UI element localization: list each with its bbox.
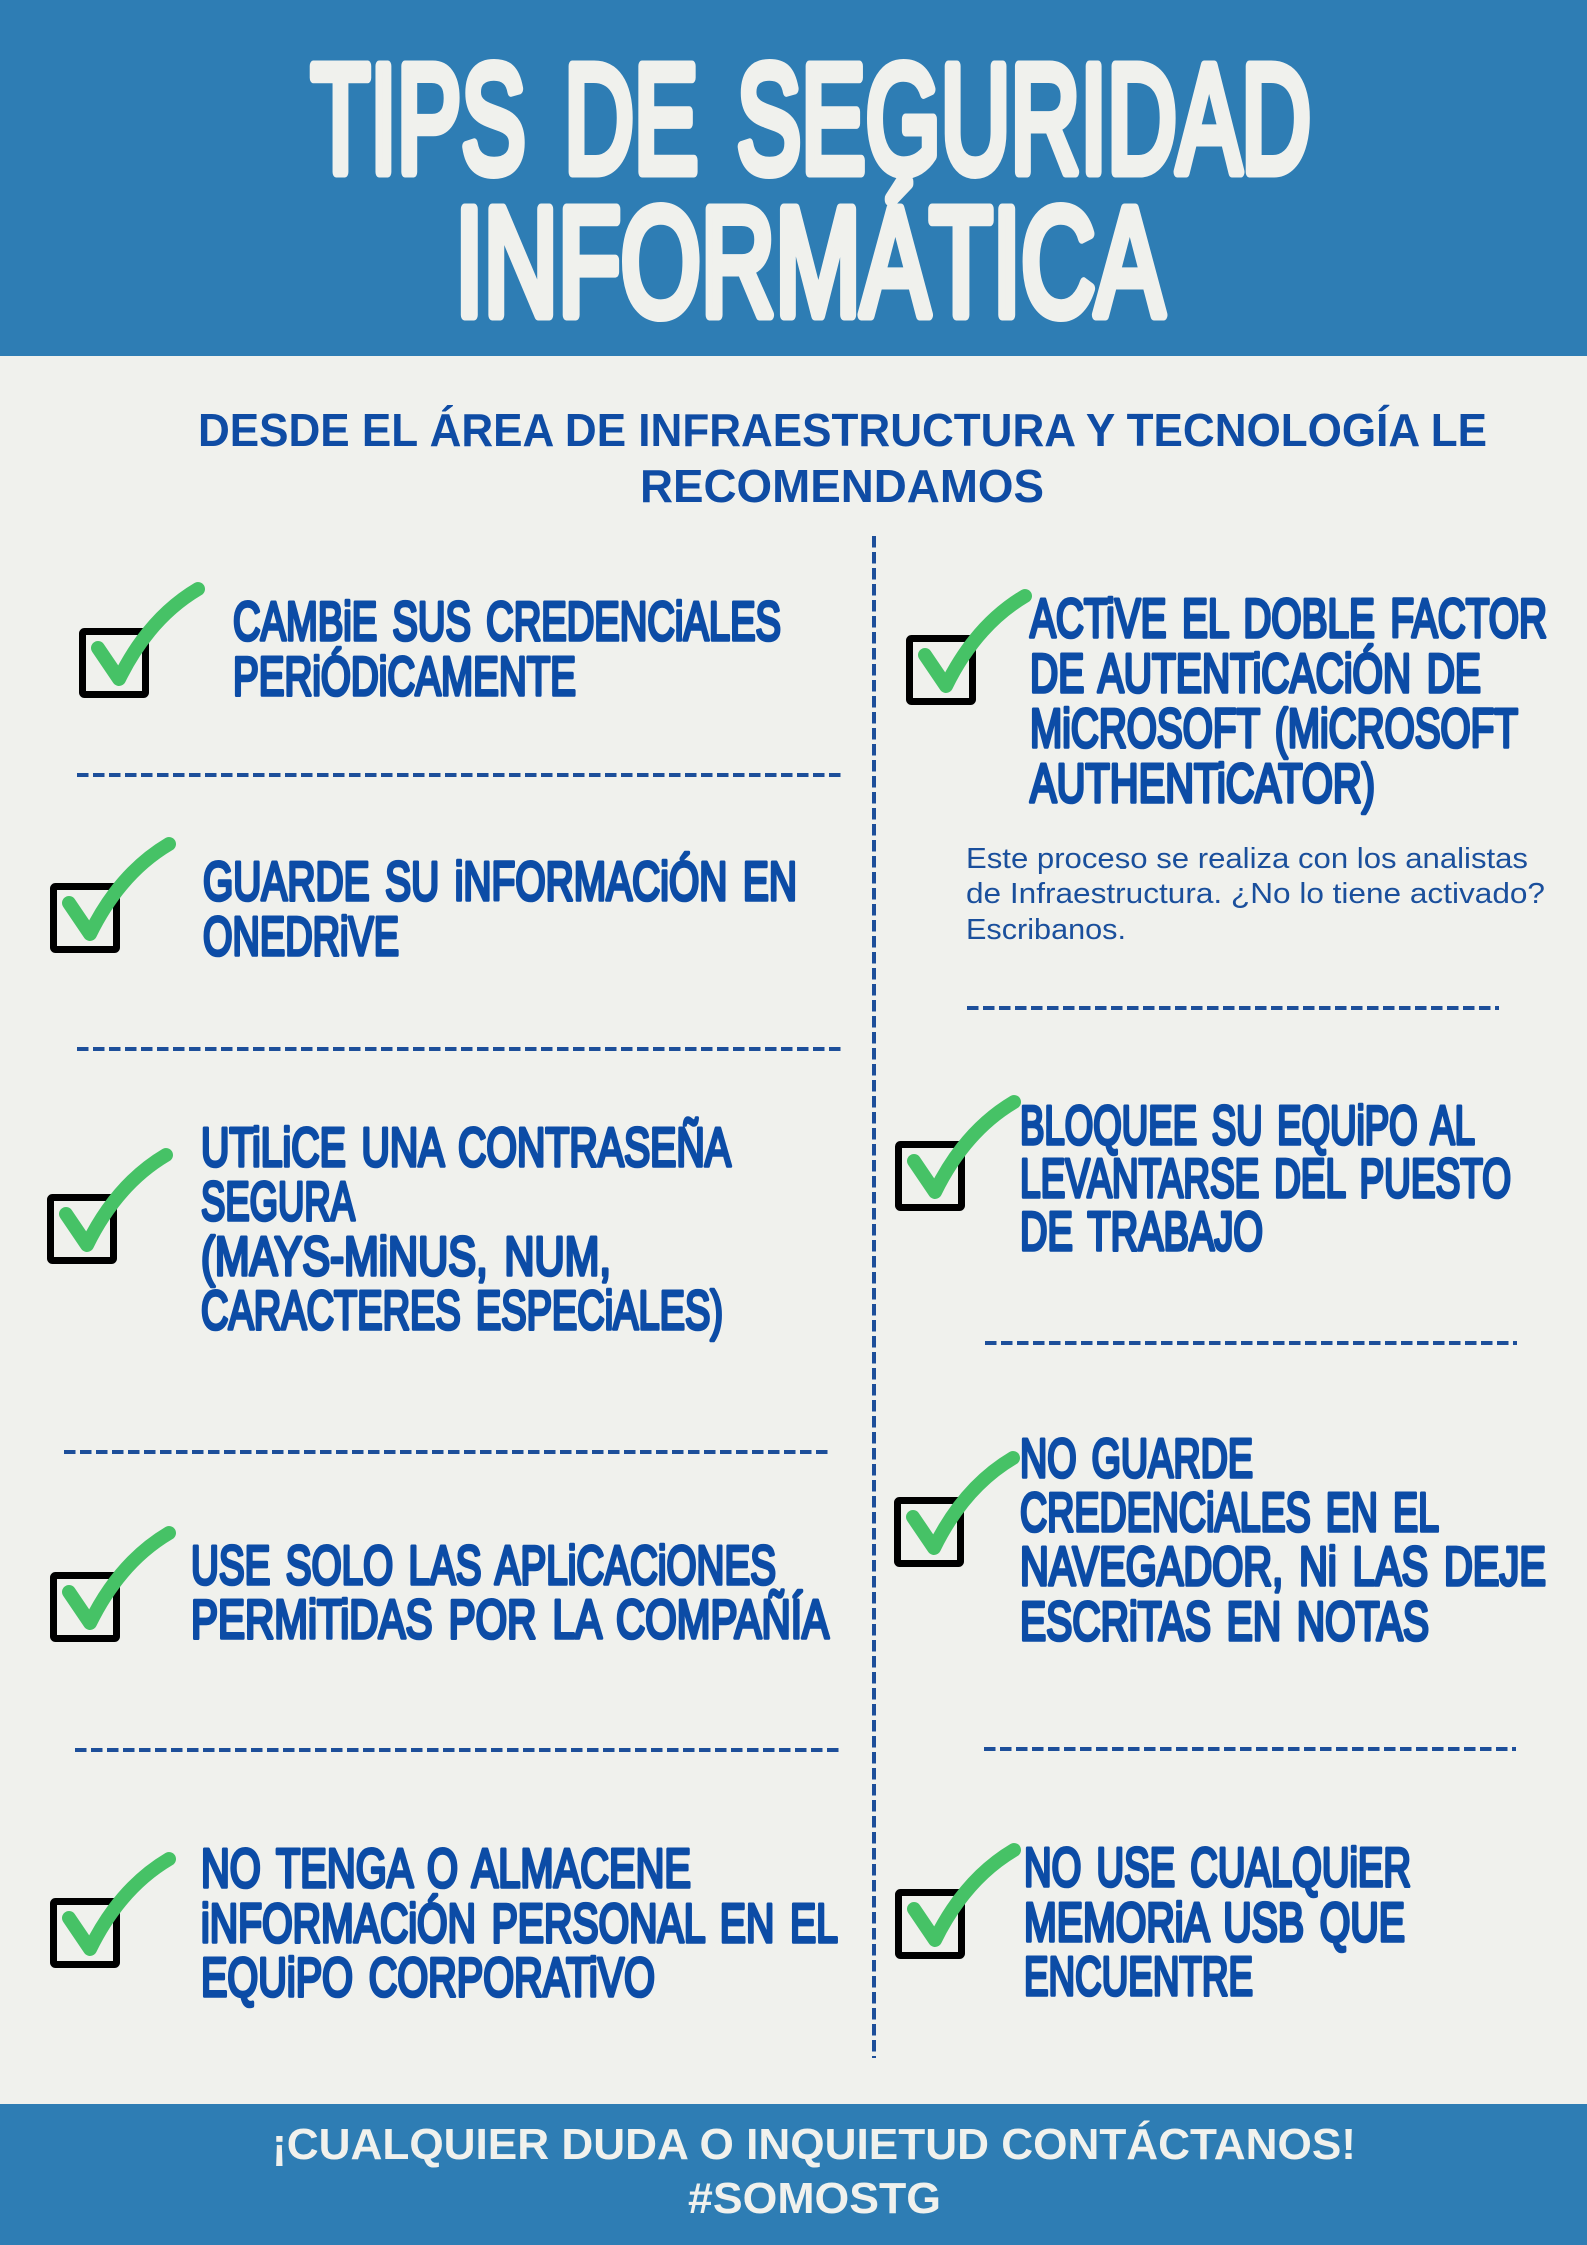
tip text 3: UTiLiCE UNA CONTRASEÑA bbox=[201, 1116, 731, 1178]
tip text 3: SEGURA bbox=[201, 1170, 355, 1232]
tip: memoria usb bbox=[898, 1836, 1411, 2007]
tip text 3: (MAYS-MiNUS, NUM, bbox=[201, 1225, 611, 1287]
note: doble factor: Escribanos. bbox=[966, 914, 1126, 946]
vertical divider bbox=[872, 536, 876, 2058]
tip text 1: PERiÓDiCAMENTE bbox=[233, 645, 576, 707]
tip: bloquee equipo bbox=[898, 1094, 1511, 1262]
icon: checkbox 6 bbox=[910, 596, 1025, 702]
tip text 5: NO TENGA O ALMACENE bbox=[201, 1837, 691, 1899]
tip text 9: MEMORiA USB QUE bbox=[1024, 1891, 1405, 1953]
tip text 3: CARACTERES ESPECiALES) bbox=[201, 1279, 723, 1341]
tip: cambie credenciales bbox=[82, 589, 781, 707]
footer text bbox=[272, 2119, 1356, 2223]
header banner bbox=[0, 0, 1587, 356]
icon: checkbox 9 bbox=[898, 1850, 1014, 1956]
tip: aplicaciones permitidas bbox=[54, 1533, 829, 1650]
footer banner bbox=[0, 2104, 1587, 2245]
tip text 9: NO USE CUALQUiER bbox=[1024, 1836, 1411, 1898]
tip text 4: USE SOLO LAS APLiCACiONES bbox=[191, 1534, 776, 1596]
tip: información personal bbox=[54, 1837, 838, 2008]
tip text 6 bbox=[1030, 587, 1547, 814]
tip text 3 bbox=[201, 1116, 731, 1341]
tip text 9 bbox=[1024, 1836, 1411, 2007]
note: doble factor: de Infraestructura. ¿No lo tiene activado? bbox=[966, 878, 1545, 910]
title: INFORMÁTICA bbox=[455, 176, 1164, 348]
tip text 5: EQUiPO CORPORATiVO bbox=[201, 1946, 655, 2008]
tip text 8: ESCRiTAS EN NOTAS bbox=[1020, 1590, 1429, 1652]
subtitle bbox=[198, 404, 1487, 512]
note: doble factor bbox=[966, 843, 1545, 946]
tip text 8: NO GUARDE bbox=[1020, 1427, 1253, 1489]
tip text 2 bbox=[203, 850, 797, 967]
icon: checkbox 7 bbox=[898, 1102, 1014, 1208]
tip: contraseña segura bbox=[50, 1116, 731, 1341]
tip: onedrive bbox=[54, 844, 797, 967]
icon: checkbox 3 bbox=[50, 1155, 166, 1260]
tip text 4 bbox=[191, 1534, 829, 1650]
tip text 9: ENCUENTRE bbox=[1024, 1945, 1253, 2007]
tip text 6: AUTHENTiCATOR) bbox=[1030, 752, 1375, 814]
footer text: #SOMOSTG bbox=[688, 2174, 941, 2223]
icon: checkbox 1 bbox=[82, 589, 198, 694]
tip text 1: CAMBiE SUS CREDENCiALES bbox=[233, 590, 781, 652]
tip text 2: GUARDE SU iNFORMACiÓN EN bbox=[203, 850, 797, 912]
tip text 7 bbox=[1020, 1094, 1511, 1262]
tip: doble factor bbox=[910, 587, 1547, 946]
title bbox=[311, 33, 1311, 348]
tip: no guarde credenciales bbox=[898, 1427, 1546, 1652]
subtitle: RECOMENDAMOS bbox=[640, 460, 1044, 512]
tip text 8 bbox=[1020, 1427, 1546, 1652]
note: doble factor: Este proceso se realiza con los analistas bbox=[966, 843, 1528, 875]
tip text 5: iNFORMACiÓN PERSONAL EN EL bbox=[201, 1892, 838, 1954]
icon: checkbox 8 bbox=[898, 1458, 1013, 1564]
tip text 7: DE TRABAJO bbox=[1020, 1200, 1263, 1262]
icon: checkbox 4 bbox=[54, 1533, 169, 1638]
icon: checkbox 2 bbox=[54, 844, 169, 950]
tip text 1 bbox=[233, 590, 781, 707]
footer text: ¡CUALQUIER DUDA O INQUIETUD CONTÁCTANOS! bbox=[272, 2119, 1356, 2169]
tip text 2: ONEDRiVE bbox=[203, 905, 399, 967]
tip text 4: PERMiTiDAS POR LA COMPAÑÍA bbox=[191, 1588, 829, 1650]
subtitle: DESDE EL ÁREA DE INFRAESTRUCTURA Y TECNOLOGÍA LE bbox=[198, 404, 1487, 456]
icon: checkbox 5 bbox=[54, 1859, 169, 1964]
tip text 5 bbox=[201, 1837, 838, 2008]
